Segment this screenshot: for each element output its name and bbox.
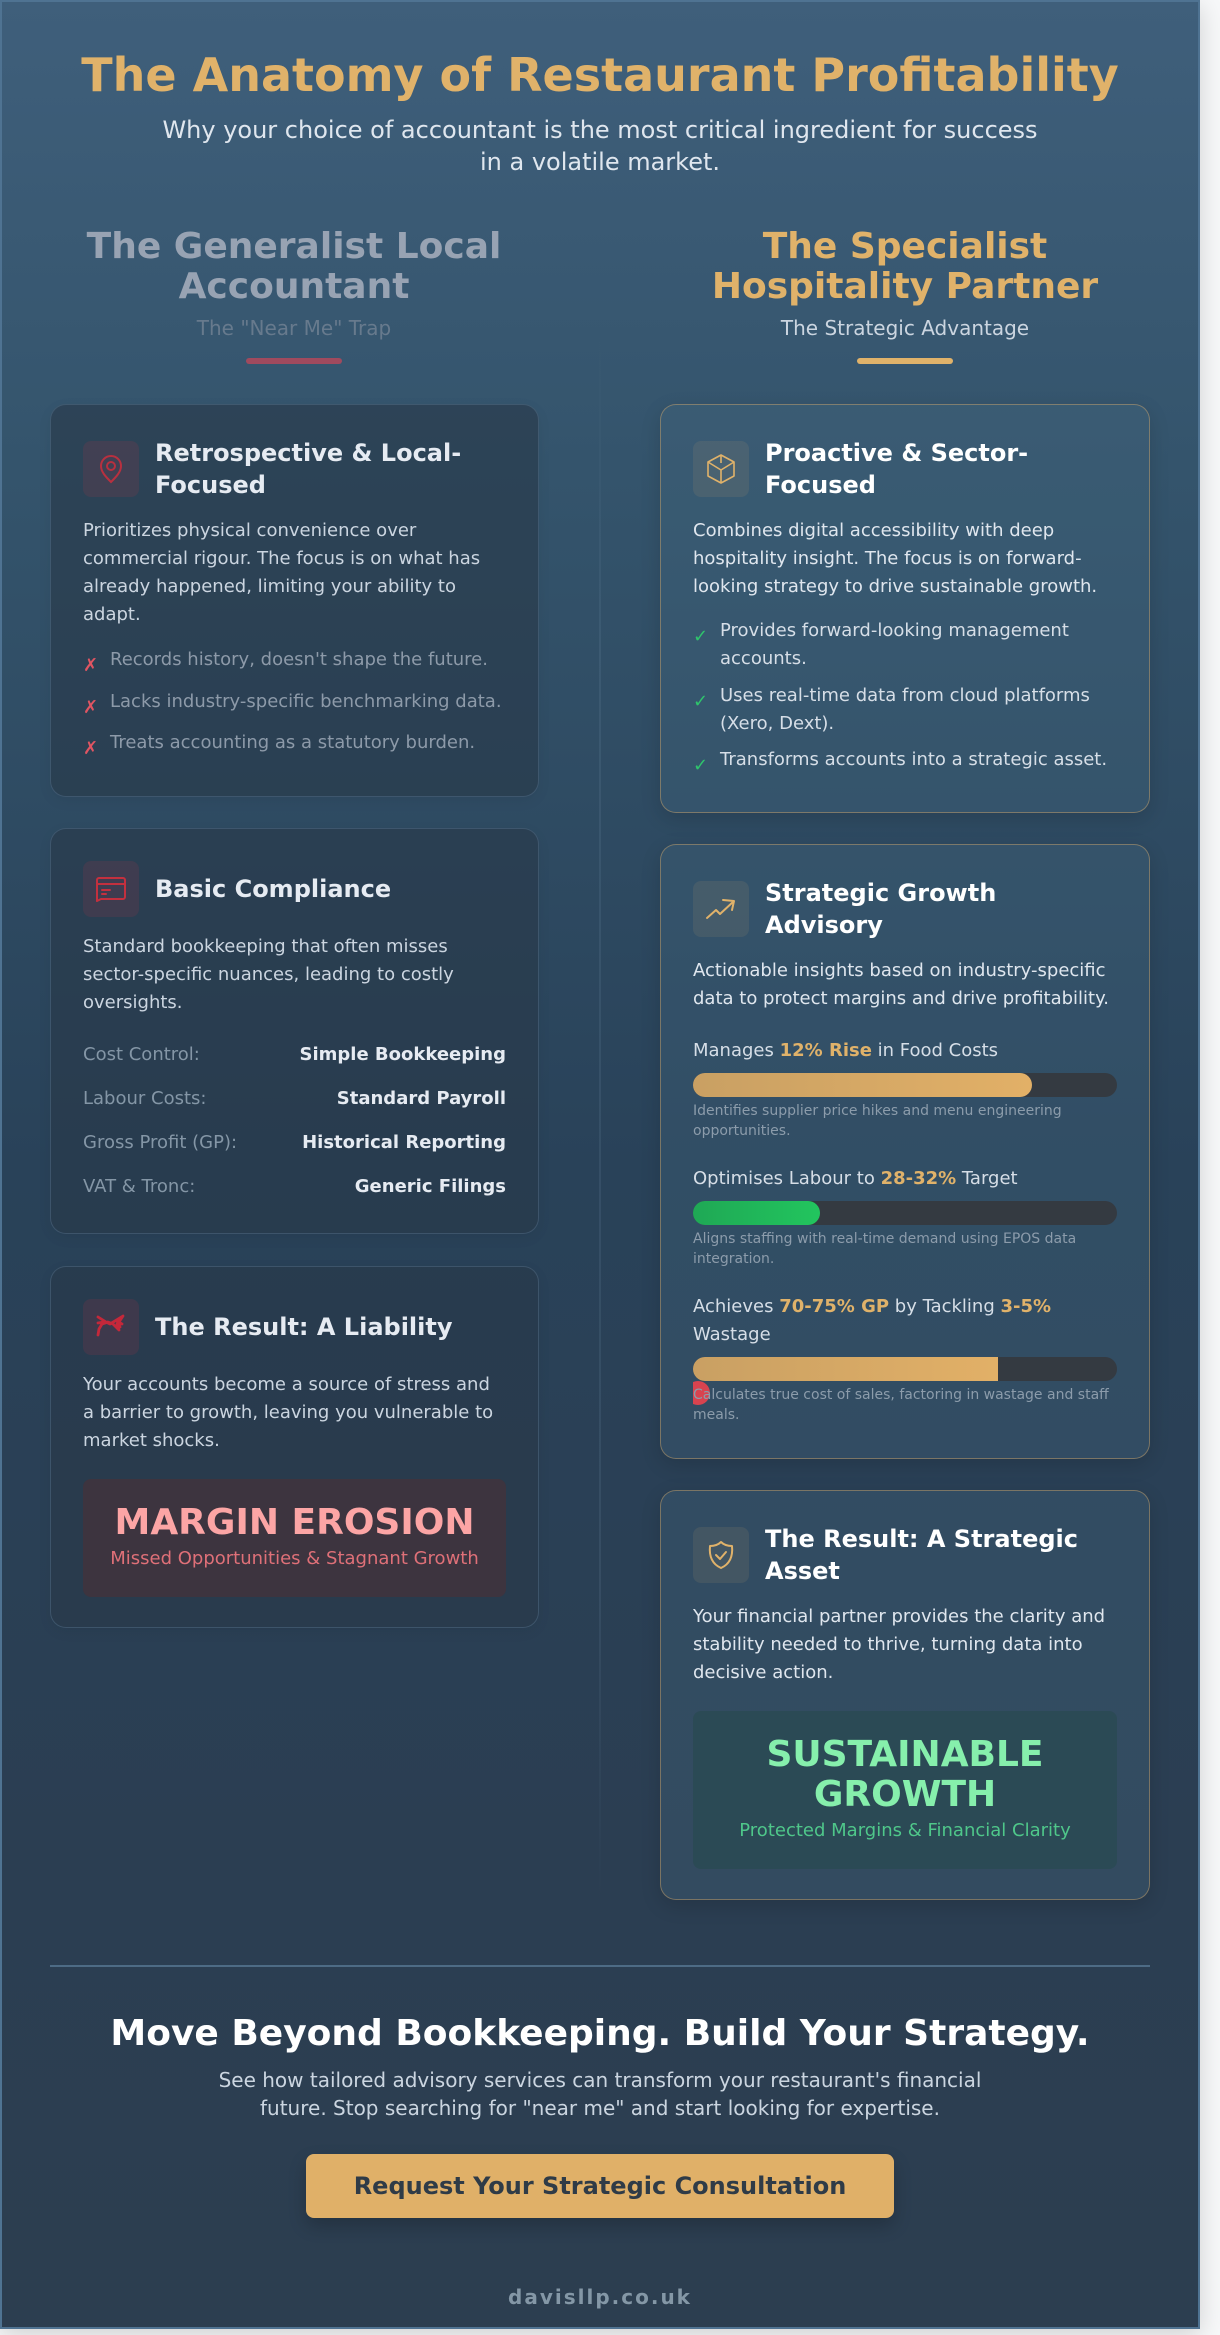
check list: ✓ <box>693 690 708 712</box>
callout: margin erosion: Missed Opportunities & Stagnant Growth <box>110 1548 479 1569</box>
subtitle: in a volatile market. <box>480 148 720 176</box>
cross list: Records history, doesn't shape the future. <box>110 649 488 670</box>
callout: sustainable growth: SUSTAINABLE GROWTH <box>766 1734 1044 1815</box>
cross list <box>83 649 502 759</box>
body text: Standard bookkeeping that often misses sector-specific nuances, leading to costly oversights. <box>83 936 454 1013</box>
body text: Your financial partner provides the clarity and stability needed to thrive, turning data into decisive action. <box>693 1606 1105 1683</box>
card heading: The Result: A Strategic Asset <box>765 1525 1078 1585</box>
subtitle: Why your choice of accountant is the most critical ingredient for success <box>162 116 1038 144</box>
call to action text <box>219 2068 981 2120</box>
column heading: generalist <box>86 226 501 364</box>
body text: Your accounts become a source of stress and a barrier to growth, leaving you vulnerable to market shocks. <box>83 1374 493 1451</box>
card heading: The Result: A Liability <box>155 1313 452 1341</box>
comparison rows: Gross Profit (GP): <box>83 1132 237 1153</box>
body text: Prioritizes physical convenience over commercial rigour. The focus is on what has already happened, limiting your ability to adapt. <box>83 520 480 625</box>
metric: labour: Optimises Labour to 28-32% Target <box>693 1168 1018 1189</box>
comparison rows: Standard Payroll <box>337 1088 506 1109</box>
panel: result a liability <box>50 1266 539 1628</box>
icon: location pin <box>83 441 139 497</box>
metric: labour <box>693 1168 1117 1267</box>
metric: food costs <box>693 1040 1117 1139</box>
card heading: Strategic Growth Advisory <box>765 879 996 939</box>
panel: result a strategic asset <box>660 1490 1150 1900</box>
comparison rows: Simple Bookkeeping <box>300 1044 506 1065</box>
column heading: specialist <box>712 226 1098 364</box>
cross list: Lacks industry-specific benchmarking data. <box>110 690 502 712</box>
call to action text: future. Stop searching for "near me" and start looking for expertise. <box>260 2096 940 2120</box>
card heading: Retrospective & Local-Focused <box>155 439 461 499</box>
icon: cube <box>693 441 749 497</box>
title: The Anatomy of Restaurant Profitability <box>81 48 1119 102</box>
check list: ✓ <box>693 626 708 647</box>
panel: strategic growth advisory <box>660 844 1150 1459</box>
comparison rows: Generic Filings <box>355 1176 506 1197</box>
metric: gross profit: Achieves 70-75% GP by Tackling 3-5% Wastage <box>693 1296 1051 1345</box>
body text: Combines digital accessibility with deep hospitality insight. The focus is on forward-looking strategy to drive sustainable growth. <box>693 520 1097 597</box>
panel: proactive and sector-focused <box>660 404 1150 813</box>
comparison rows: Labour Costs: <box>83 1088 206 1109</box>
cross list: Treats accounting as a statutory burden. <box>110 732 475 753</box>
footer url: davisllp.co.uk <box>508 2285 692 2309</box>
comparison rows: Historical Reporting <box>302 1132 506 1153</box>
call to action heading: Move Beyond Bookkeeping. Build Your Strategy. <box>110 2013 1090 2054</box>
comparison rows: VAT & Tronc: <box>83 1176 195 1197</box>
card heading: Proactive & Sector-Focused <box>765 439 1028 499</box>
callout: margin erosion <box>83 1479 506 1597</box>
subtitle <box>162 116 1038 176</box>
column heading: generalist: The "Near Me" Trap <box>197 316 391 340</box>
metric: food costs: Identifies supplier price hikes and menu engineering opportunities. <box>693 1103 1062 1139</box>
column heading: specialist: The Strategic Advantage <box>781 316 1029 340</box>
check list: ✓ <box>693 755 708 776</box>
metric: food costs: Manages 12% Rise in Food Costs <box>693 1040 998 1061</box>
callout: margin erosion: MARGIN EROSION <box>114 1502 474 1543</box>
metric: labour: Aligns staffing with real-time demand using EPOS data integration. <box>693 1231 1076 1267</box>
icon: broken link <box>83 1299 139 1355</box>
column heading: specialist: The Specialist <box>763 226 1047 267</box>
card heading: Basic Compliance <box>155 875 391 903</box>
callout: sustainable growth: Protected Margins & Financial Clarity <box>739 1820 1071 1841</box>
icon: shield check <box>693 1527 749 1583</box>
panel: basic compliance <box>50 828 539 1234</box>
check list <box>693 620 1107 776</box>
button <box>306 2154 894 2218</box>
check list: Transforms accounts into a strategic asset. <box>720 749 1107 770</box>
panel: retrospective and local-focused <box>50 404 539 797</box>
callout: sustainable growth <box>693 1711 1117 1869</box>
icon: message card <box>83 861 139 917</box>
check list: Uses real-time data from cloud platforms (Xero, Dext). <box>720 684 1090 734</box>
cross list: ✗ <box>83 738 98 759</box>
column heading: specialist: Hospitality Partner <box>712 266 1098 307</box>
check list: Provides forward-looking management accounts. <box>720 620 1069 669</box>
comparison rows <box>83 1044 506 1197</box>
metric: gross profit <box>693 1296 1117 1423</box>
call to action text: See how tailored advisory services can transform your restaurant's financial <box>219 2068 981 2092</box>
icon: trending arrow <box>693 881 749 937</box>
comparison rows: Cost Control: <box>83 1044 200 1065</box>
button: Request Your Strategic Consultation <box>354 2172 846 2200</box>
column heading: generalist: The Generalist Local Accountant <box>87 226 501 307</box>
metric: gross profit: Calculates true cost of sales, factoring in wastage and staff meals. <box>693 1387 1109 1423</box>
cross list: ✗ <box>83 655 98 676</box>
body text: Actionable insights based on industry-specific data to protect margins and drive profitability. <box>693 960 1109 1009</box>
footer divider <box>50 1965 1150 1967</box>
cross list: ✗ <box>83 696 98 718</box>
